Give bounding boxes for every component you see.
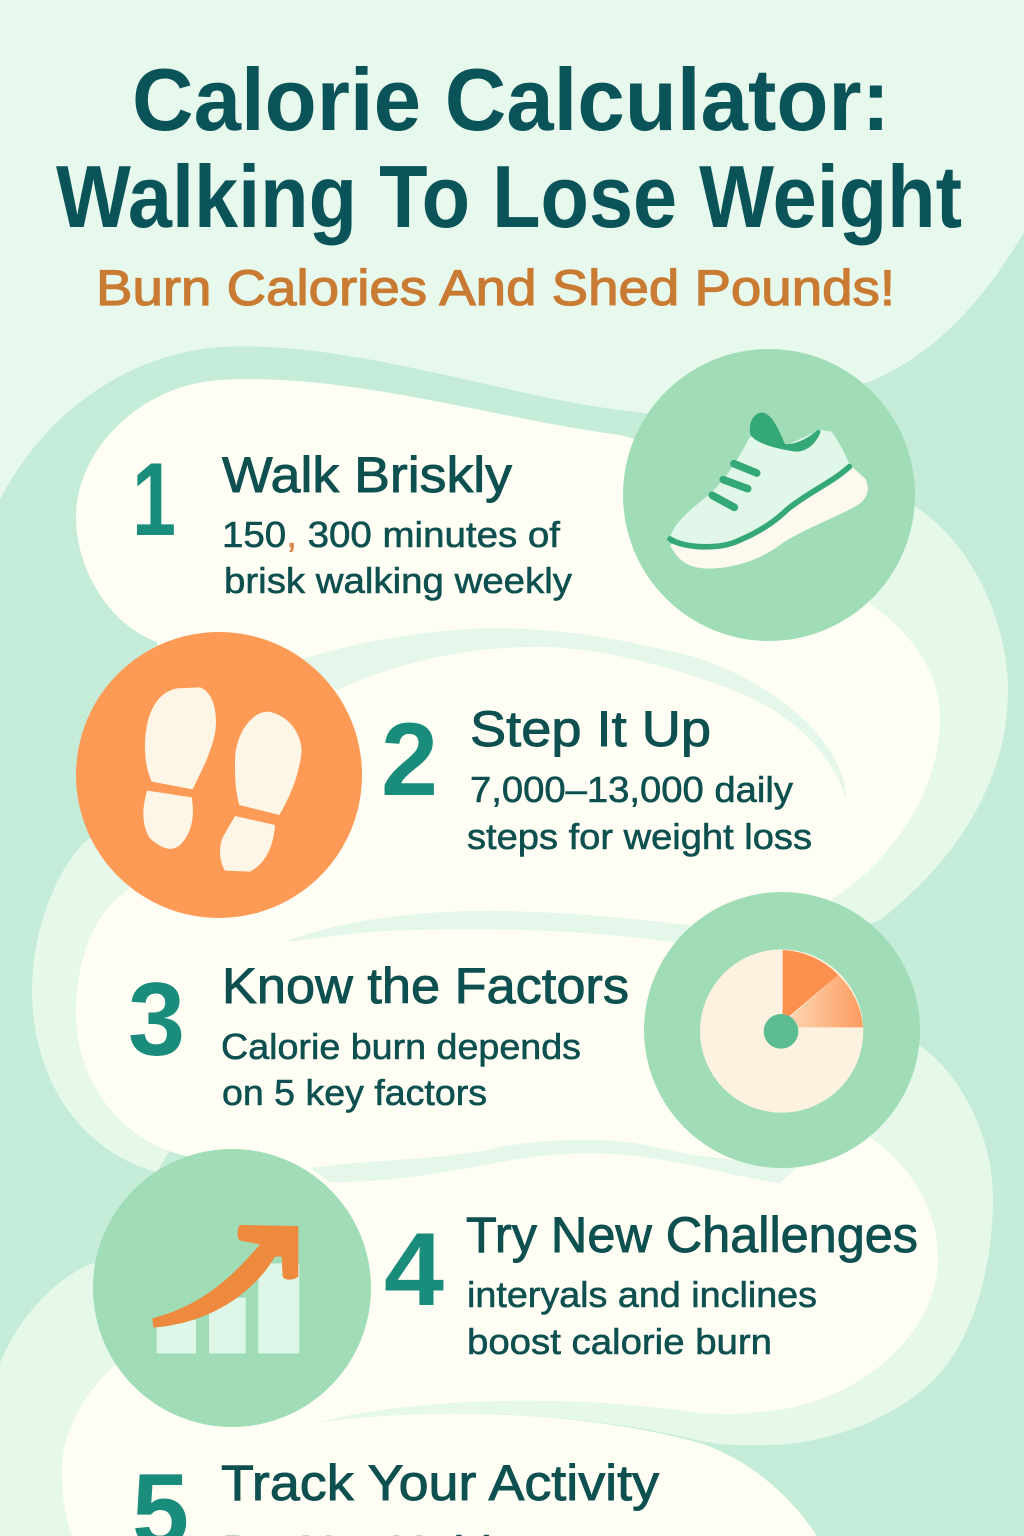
step 2 description xyxy=(467,769,812,857)
step 2 number: 2 xyxy=(381,702,438,818)
step 5 heading: Track Your Activity xyxy=(221,1455,659,1511)
step 3 number: 3 xyxy=(128,962,185,1078)
step 2 description: 7,000–13,000 daily xyxy=(470,769,793,810)
step 4: Try New Challenges xyxy=(93,1149,918,1427)
step 1: Walk Briskly xyxy=(132,349,915,641)
step 4 description: interyals and inclines xyxy=(467,1274,817,1315)
step 4 description: boost calorie burn xyxy=(467,1321,772,1362)
background: pale mint winding bands xyxy=(0,500,1008,1536)
step 1 description xyxy=(222,514,572,601)
step 3 description: on 5 key factors xyxy=(222,1072,487,1113)
faint path highlights xyxy=(285,628,846,1183)
winding cream path xyxy=(62,379,940,1536)
step 1 description: brisk walking weekly xyxy=(224,560,572,601)
step 5: Track Your Activity xyxy=(132,1453,659,1536)
step 3 description: Calorie burn depends xyxy=(221,1026,581,1067)
background: pale mint header area xyxy=(0,0,1024,500)
subtitle: Burn Calories And Shed Pounds! xyxy=(96,260,895,316)
icon: pie chart xyxy=(644,892,920,1168)
icon: rising bar chart with arrow xyxy=(93,1149,371,1427)
step 4 number: 4 xyxy=(384,1212,444,1328)
step 2 heading: Step It Up xyxy=(470,701,711,757)
step 3: Know the Factors xyxy=(128,892,920,1168)
step 2: Step It Up xyxy=(76,632,812,918)
icon: running shoe xyxy=(623,349,915,641)
step 3 heading: Know the Factors xyxy=(222,958,629,1014)
step 1 heading: Walk Briskly xyxy=(222,447,512,503)
title: Calorie Calculator: xyxy=(132,50,890,149)
step 1 number: 1 xyxy=(132,442,176,558)
step 2 description: steps for weight loss xyxy=(467,816,812,857)
step 3 description xyxy=(221,1026,581,1113)
step 1 description: 150, 300 minutes of xyxy=(222,514,561,555)
title xyxy=(56,50,962,246)
step 4 heading: Try New Challenges xyxy=(466,1207,918,1263)
icon: footprints xyxy=(76,632,362,918)
step 4 description xyxy=(467,1274,817,1362)
